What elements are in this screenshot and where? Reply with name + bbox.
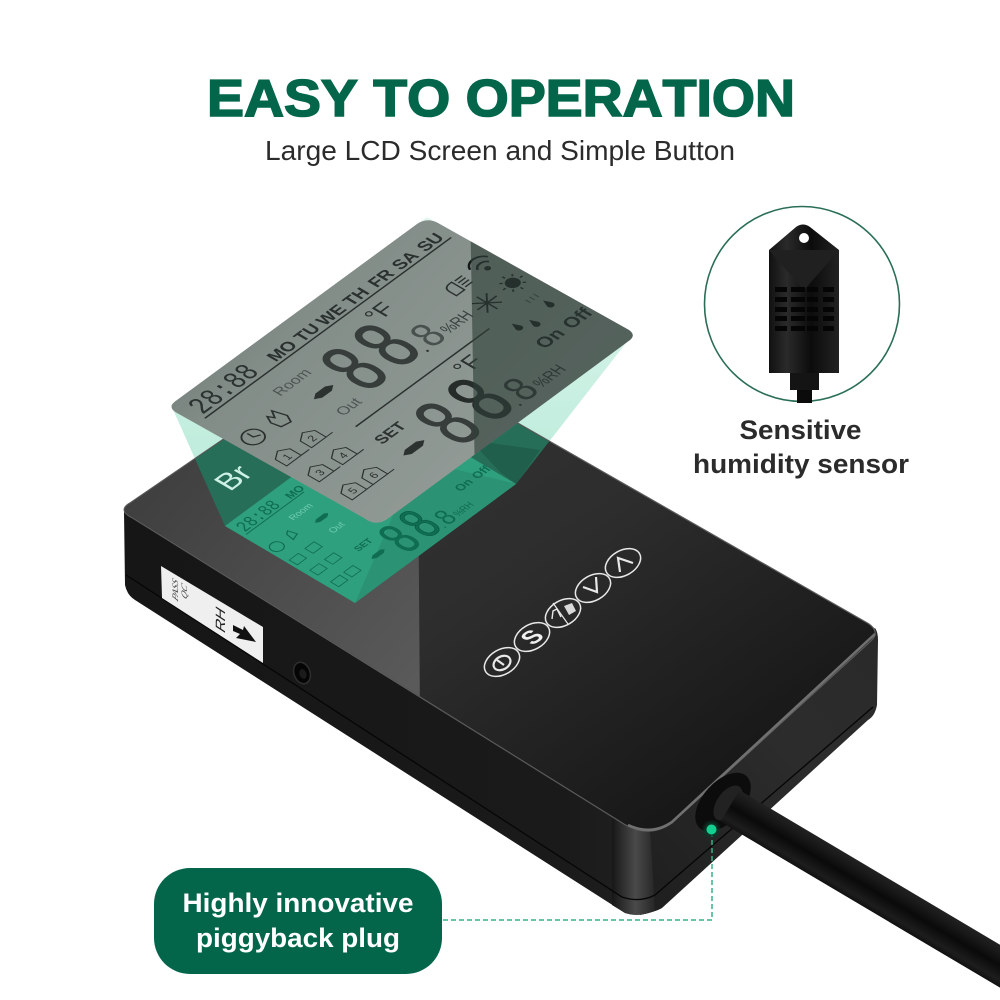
- sensor caption: [693, 415, 910, 479]
- sensor jack: [291, 660, 313, 686]
- icon: clock: [237, 426, 270, 448]
- sensor hole: [799, 233, 809, 243]
- cable: [721, 790, 1000, 1000]
- bright edge of right rim: [628, 634, 875, 830]
- room label: Room: [269, 366, 316, 399]
- plug marker dot: [702, 820, 722, 840]
- day labels: [262, 230, 449, 364]
- out label: Out: [332, 395, 367, 418]
- callout pill: [154, 868, 442, 974]
- on label: On: [531, 326, 570, 352]
- down button: [570, 568, 616, 608]
- sensor ring: [704, 206, 900, 402]
- clock icon: [266, 540, 287, 554]
- big digit 1: 8: [364, 517, 434, 560]
- house 2: 2: [305, 434, 320, 444]
- mode button: [540, 593, 586, 633]
- day label: MO: [283, 484, 308, 501]
- device seam lines: [126, 575, 873, 900]
- clock digits: 28:88: [182, 360, 269, 420]
- device right side: [640, 628, 878, 915]
- set: SET: [352, 537, 376, 553]
- device top face: [124, 423, 874, 828]
- day labels: TU: [289, 321, 325, 345]
- icon: humidifier drop: [525, 292, 556, 312]
- glass surface: [124, 424, 874, 828]
- icon: hand: [262, 408, 294, 429]
- subtitle: Large LCD Screen and Simple Button: [265, 135, 735, 166]
- set decimal digit: 8: [492, 371, 550, 408]
- pill text line 2: piggyback plug: [196, 923, 400, 953]
- room big digit 2: 8: [330, 310, 442, 379]
- house 4: 4: [336, 451, 352, 461]
- set button: [509, 617, 555, 657]
- dark green projection on glass: [195, 424, 549, 603]
- set minus: [400, 438, 428, 458]
- touch buttons: [479, 543, 646, 682]
- sensor caption: humidity sensor: [693, 449, 910, 479]
- day labels: FR: [363, 266, 399, 290]
- icon: snowflake: [467, 290, 507, 316]
- sensor collar: [790, 373, 819, 390]
- controller device: [124, 422, 878, 915]
- power button: [479, 642, 525, 682]
- icon: houses: [270, 422, 396, 502]
- house 3: 3: [313, 468, 328, 478]
- pill background: [154, 868, 442, 974]
- gloss reflection: [125, 460, 420, 696]
- set big digit 1: 8: [392, 388, 503, 457]
- on label: On: [451, 477, 477, 494]
- lcd readout: [179, 219, 639, 525]
- room decimal point: .: [409, 340, 435, 356]
- big digit 2: 8: [385, 502, 455, 545]
- house 5: 5: [346, 486, 361, 496]
- day labels: SU: [412, 230, 449, 254]
- qc text: QC: [180, 581, 190, 602]
- cable grommet: [685, 763, 761, 841]
- screen readout on device: [230, 408, 520, 603]
- lcd base: [172, 220, 633, 523]
- icon: sun: [493, 270, 533, 296]
- room decimal digit: 8: [399, 317, 457, 354]
- green projection beam: [171, 217, 633, 603]
- set label: SET: [371, 420, 411, 447]
- decimal digit: 8: [427, 505, 464, 529]
- title: EASY TO OPERATION: [207, 70, 795, 128]
- hand icon: [284, 529, 299, 540]
- sensor body: [769, 224, 839, 373]
- reflected dim part of screen: [355, 460, 516, 603]
- icon: fan: [444, 275, 474, 296]
- house 1: 1: [280, 452, 296, 462]
- line under days: [246, 492, 304, 534]
- set decimal point: .: [502, 394, 528, 410]
- day labels: TH: [338, 285, 374, 308]
- lcd reflection shadow: [470, 241, 633, 454]
- device corner highlight: [612, 818, 655, 915]
- room fahrenheit: °F: [358, 299, 401, 327]
- day underline: [205, 237, 451, 418]
- dashed leader line: [443, 832, 712, 920]
- icon: wifi: [464, 253, 498, 276]
- darker band beside screen: [480, 443, 540, 484]
- set fahrenheit: °F: [447, 351, 490, 379]
- off label: Off: [468, 463, 495, 481]
- minus 2: [369, 548, 387, 560]
- minus: [313, 512, 330, 524]
- arrow: [233, 625, 256, 642]
- room big digit 1: 8: [298, 334, 409, 403]
- off label: Off: [558, 305, 599, 332]
- bright LCD screen on glass: [225, 458, 516, 603]
- set percent: %RH: [528, 362, 571, 390]
- room percent: %RH: [436, 308, 478, 337]
- houses: [289, 541, 362, 588]
- set big digit 2: 8: [424, 365, 535, 433]
- day labels: MO: [262, 338, 302, 364]
- sensor vents: [775, 287, 834, 331]
- day labels: WE: [311, 301, 351, 328]
- pill text: Highly innovative: [182, 888, 414, 918]
- decimal: .: [433, 520, 450, 530]
- clock digits: 28:88: [231, 497, 287, 535]
- house 6: 6: [367, 471, 382, 481]
- divider: [356, 329, 489, 427]
- up button: [600, 543, 646, 583]
- room label: Room: [286, 502, 316, 522]
- sensor caption: Sensitive: [740, 415, 862, 445]
- device front side: [124, 512, 670, 915]
- sticker label: [161, 566, 263, 663]
- percent label: %RH: [451, 500, 477, 518]
- room minus: [310, 383, 337, 401]
- device top rim: [125, 342, 875, 831]
- sensor callout: [704, 206, 900, 403]
- rh text: RH: [214, 604, 228, 636]
- out label: Out: [326, 520, 348, 535]
- pass text: PASS: [171, 577, 181, 605]
- sensor fold: [769, 250, 839, 290]
- lcd panel floating: [172, 220, 633, 523]
- set button: S: [515, 626, 551, 649]
- sensor cable: [797, 389, 812, 403]
- sticker paper: [161, 566, 263, 663]
- brand text on glass: Br: [207, 461, 260, 495]
- day labels: SA: [387, 248, 424, 273]
- icon: drops: [509, 314, 542, 336]
